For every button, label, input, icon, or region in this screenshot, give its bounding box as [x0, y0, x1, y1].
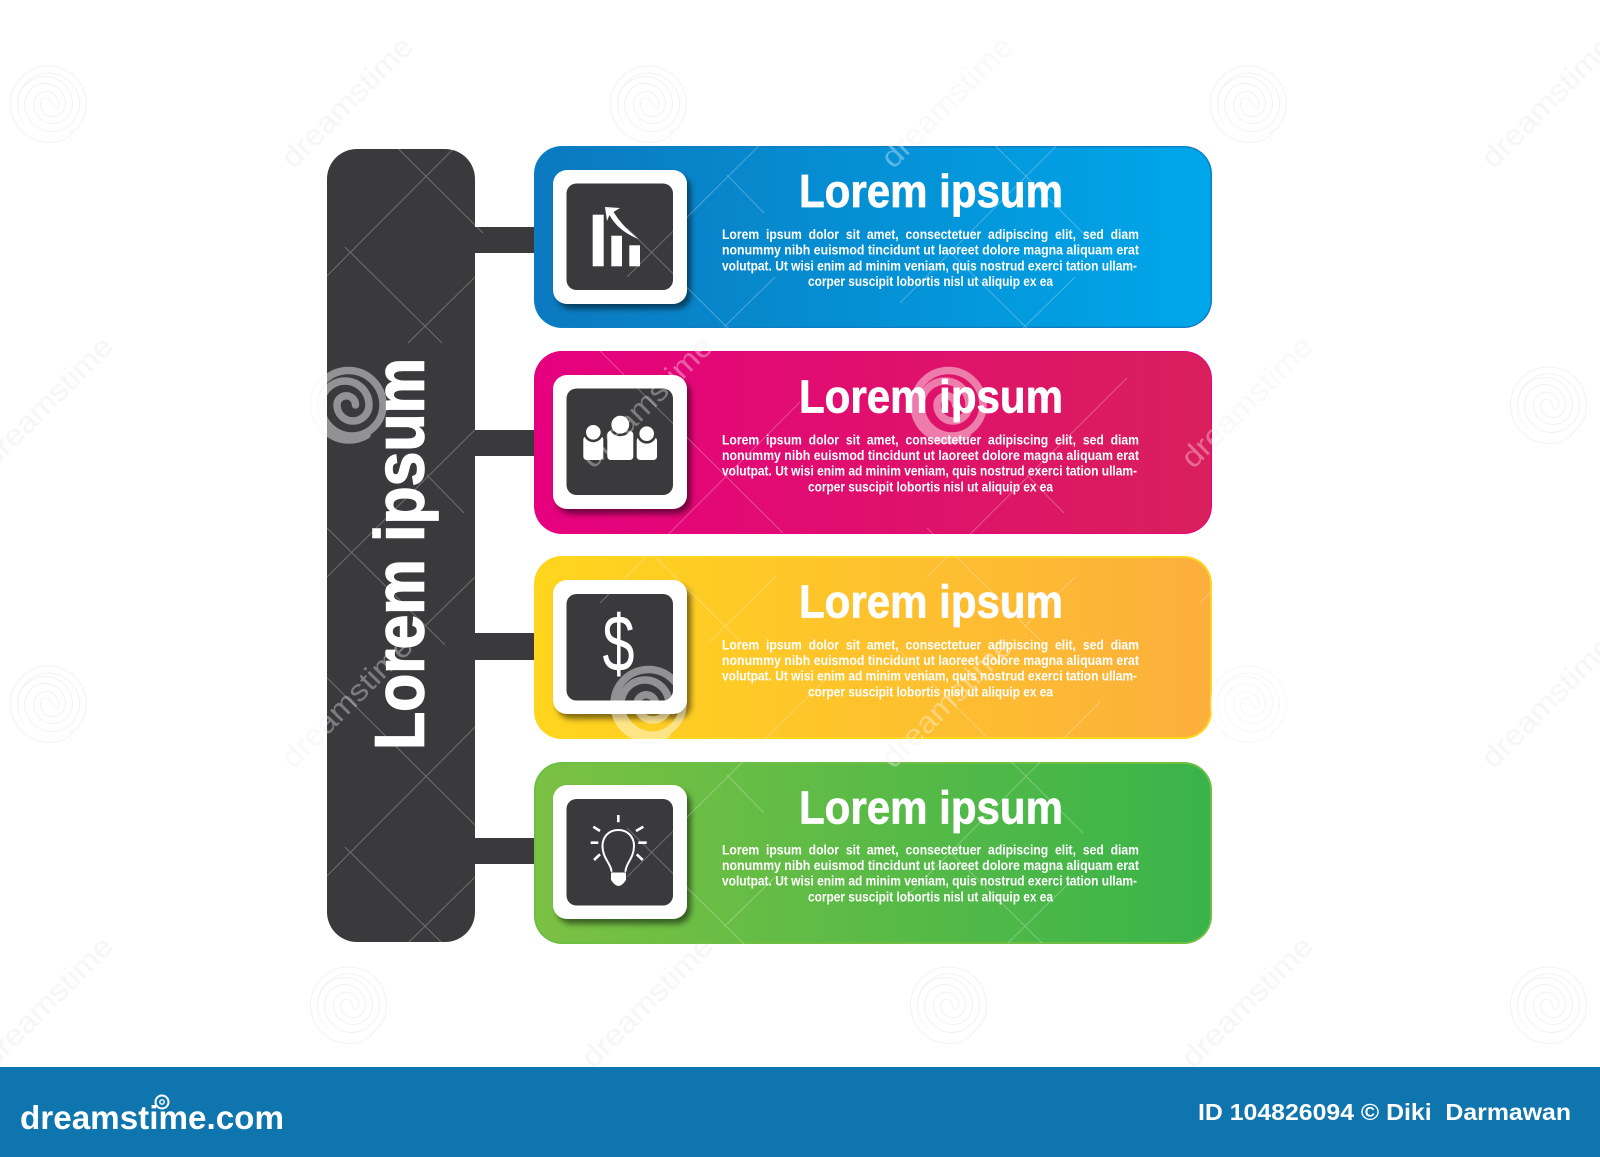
body text: corper suscipit lobortis nisl ut aliquip ex ea [808, 683, 1053, 699]
icon: dollar sign [553, 580, 687, 714]
sidebar panel [327, 149, 475, 942]
body text: volutpat. Ut wisi enim ad minim veniam, quis nostrud exerci tation ullam- [722, 257, 1137, 273]
body text [722, 636, 1139, 699]
body text: volutpat. Ut wisi enim ad minim veniam, quis nostrud exerci tation ullam- [722, 463, 1137, 479]
watermark overlay: lattice lines and translucent marks: dreamstime [1175, 330, 1320, 475]
body text [722, 226, 1139, 289]
body text: corper suscipit lobortis nisl ut aliquip ex ea [808, 478, 1053, 494]
footer bar [0, 1067, 1600, 1157]
watermark layer on white background: dreamstime [575, 330, 720, 475]
body text [722, 841, 1139, 904]
panel: yellow card [534, 556, 1212, 739]
body text: nonummy nibh euismod tincidunt ut laoreet dolore magna aliquam erat [722, 447, 1139, 463]
body text: nonummy nibh euismod tincidunt ut laoreet dolore magna aliquam erat [722, 857, 1139, 873]
watermark overlay: lattice lines and translucent marks: dreamstime [875, 630, 1020, 775]
body text [722, 431, 1139, 494]
panel: blue card [534, 146, 1212, 328]
icon: light bulb [553, 785, 687, 919]
watermark layer on white background: dreamstime [1175, 330, 1320, 475]
body text: Lorem ipsum dolor sit amet, consectetuer adipiscing elit, sed diam [722, 431, 1139, 447]
footer credit: ID 104826094 © Diki Darmawan [1198, 1099, 1571, 1125]
watermark layer on white background: dreamstime [1175, 930, 1320, 1075]
body text: corper suscipit lobortis nisl ut aliquip ex ea [808, 273, 1053, 289]
watermark overlay: lattice lines and translucent marks: dreamstime [875, 30, 1020, 175]
watermark layer on white background: dreamstime [875, 630, 1020, 775]
icon: dollar sign: $ [602, 599, 635, 688]
heading: Lorem ipsum [799, 781, 1063, 833]
watermark overlay: lattice lines and translucent marks: dreamstime [275, 630, 420, 775]
panel: green card [534, 762, 1212, 944]
watermark layer on white background: dreamstime [275, 30, 420, 175]
body text: Lorem ipsum dolor sit amet, consectetuer adipiscing elit, sed diam [722, 226, 1139, 242]
body text: volutpat. Ut wisi enim ad minim veniam, quis nostrud exerci tation ullam- [722, 668, 1137, 684]
heading: Lorem ipsum [799, 165, 1063, 217]
panel: magenta card [534, 351, 1212, 534]
icon: people group [553, 375, 687, 509]
body text: Lorem ipsum dolor sit amet, consectetuer adipiscing elit, sed diam [722, 841, 1139, 857]
body text: volutpat. Ut wisi enim ad minim veniam, quis nostrud exerci tation ullam- [722, 873, 1137, 889]
body text: Lorem ipsum dolor sit amet, consectetuer adipiscing elit, sed diam [722, 636, 1139, 652]
watermark overlay: lattice lines and translucent marks: dreamstime [575, 330, 720, 475]
body text: nonummy nibh euismod tincidunt ut laoreet dolore magna aliquam erat [722, 652, 1139, 668]
icon: bar chart with arrow [553, 170, 687, 304]
heading: Lorem ipsum [799, 576, 1063, 628]
sidebar heading: Lorem ipsum [361, 358, 439, 750]
body text: corper suscipit lobortis nisl ut aliquip ex ea [808, 888, 1053, 904]
footer logo: dreamstime.com [20, 1099, 284, 1136]
heading: Lorem ipsum [799, 370, 1063, 422]
watermark layer on white background: dreamstime [275, 630, 420, 775]
watermark layer on white background: dreamstime [875, 30, 1020, 175]
body text: nonummy nibh euismod tincidunt ut laoreet dolore magna aliquam erat [722, 242, 1139, 258]
watermark layer on white background: dreamstime [575, 930, 720, 1075]
connector bars [470, 227, 536, 864]
